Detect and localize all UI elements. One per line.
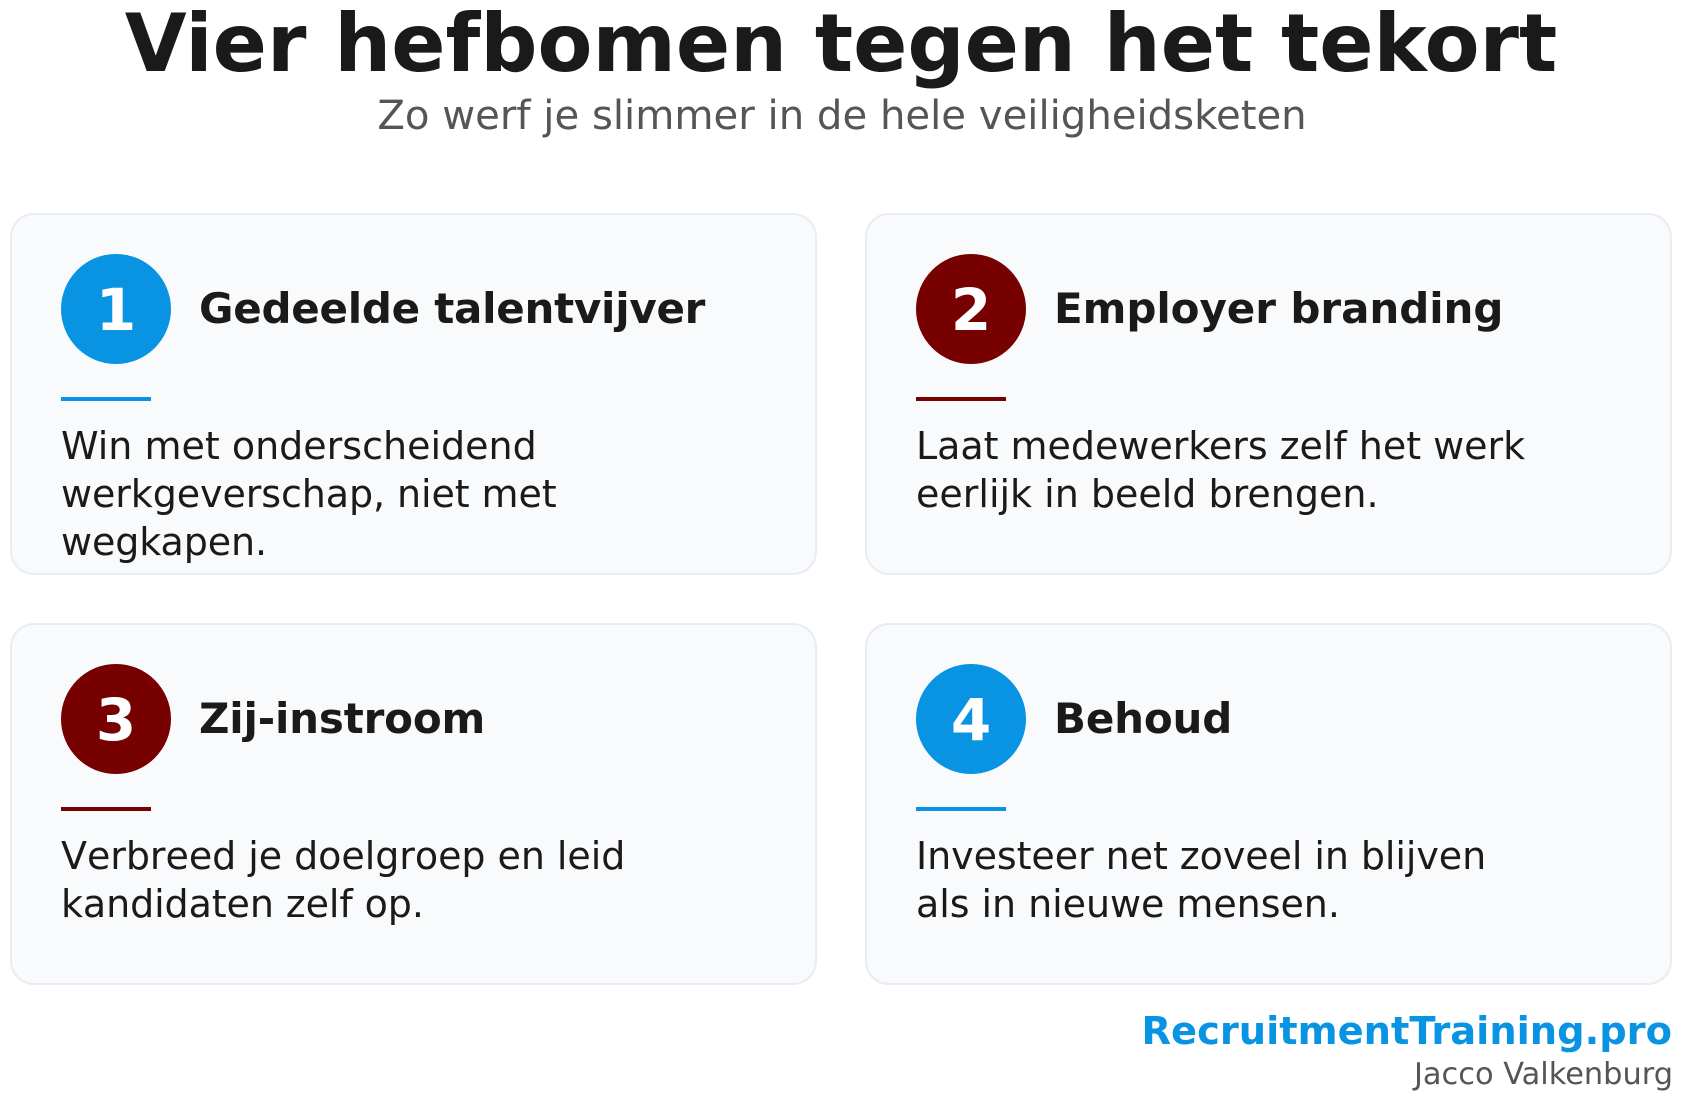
number badge 3	[61, 664, 171, 774]
accent rule	[916, 807, 1006, 811]
number badge 4	[916, 664, 1026, 774]
body text: wegkapen.	[61, 520, 267, 564]
number badge 4: 4	[951, 686, 991, 754]
number badge 1: 1	[96, 276, 136, 344]
body text: Win met onderscheidend	[61, 424, 537, 468]
body text: werkgeverschap, niet met	[61, 472, 557, 516]
body text	[61, 834, 625, 926]
body text	[61, 424, 557, 564]
body text: Laat medewerkers zelf het werk	[916, 424, 1525, 468]
accent rule	[61, 807, 151, 811]
body text	[916, 424, 1525, 516]
number badge 1	[61, 254, 171, 364]
heading: Zij-instroom	[199, 694, 485, 743]
heading: Behoud	[1054, 694, 1232, 743]
body text: als in nieuwe mensen.	[916, 882, 1340, 926]
body text: kandidaten zelf op.	[61, 882, 424, 926]
heading: Gedeelde talentvijver	[199, 284, 705, 333]
accent rule	[916, 397, 1006, 401]
accent rule	[61, 397, 151, 401]
panel: behoud	[865, 623, 1672, 985]
body text: eerlijk in beeld brengen.	[916, 472, 1379, 516]
number badge 3: 3	[96, 686, 136, 754]
body text: Verbreed je doelgroep en leid	[61, 834, 625, 878]
brand name: RecruitmentTraining.pro	[1142, 1009, 1672, 1054]
number badge 2: 2	[951, 276, 991, 344]
panel: gedeelde talentvijver	[10, 213, 817, 575]
body text	[916, 834, 1486, 926]
panel: zij-instroom	[10, 623, 817, 985]
body text: Investeer net zoveel in blijven	[916, 834, 1486, 878]
author: Jacco Valkenburg	[1414, 1057, 1673, 1092]
panel: employer branding	[865, 213, 1672, 575]
number badge 2	[916, 254, 1026, 364]
heading: Employer branding	[1054, 284, 1503, 333]
subtitle: Zo werf je slimmer in de hele veiligheidsketen	[377, 93, 1307, 139]
